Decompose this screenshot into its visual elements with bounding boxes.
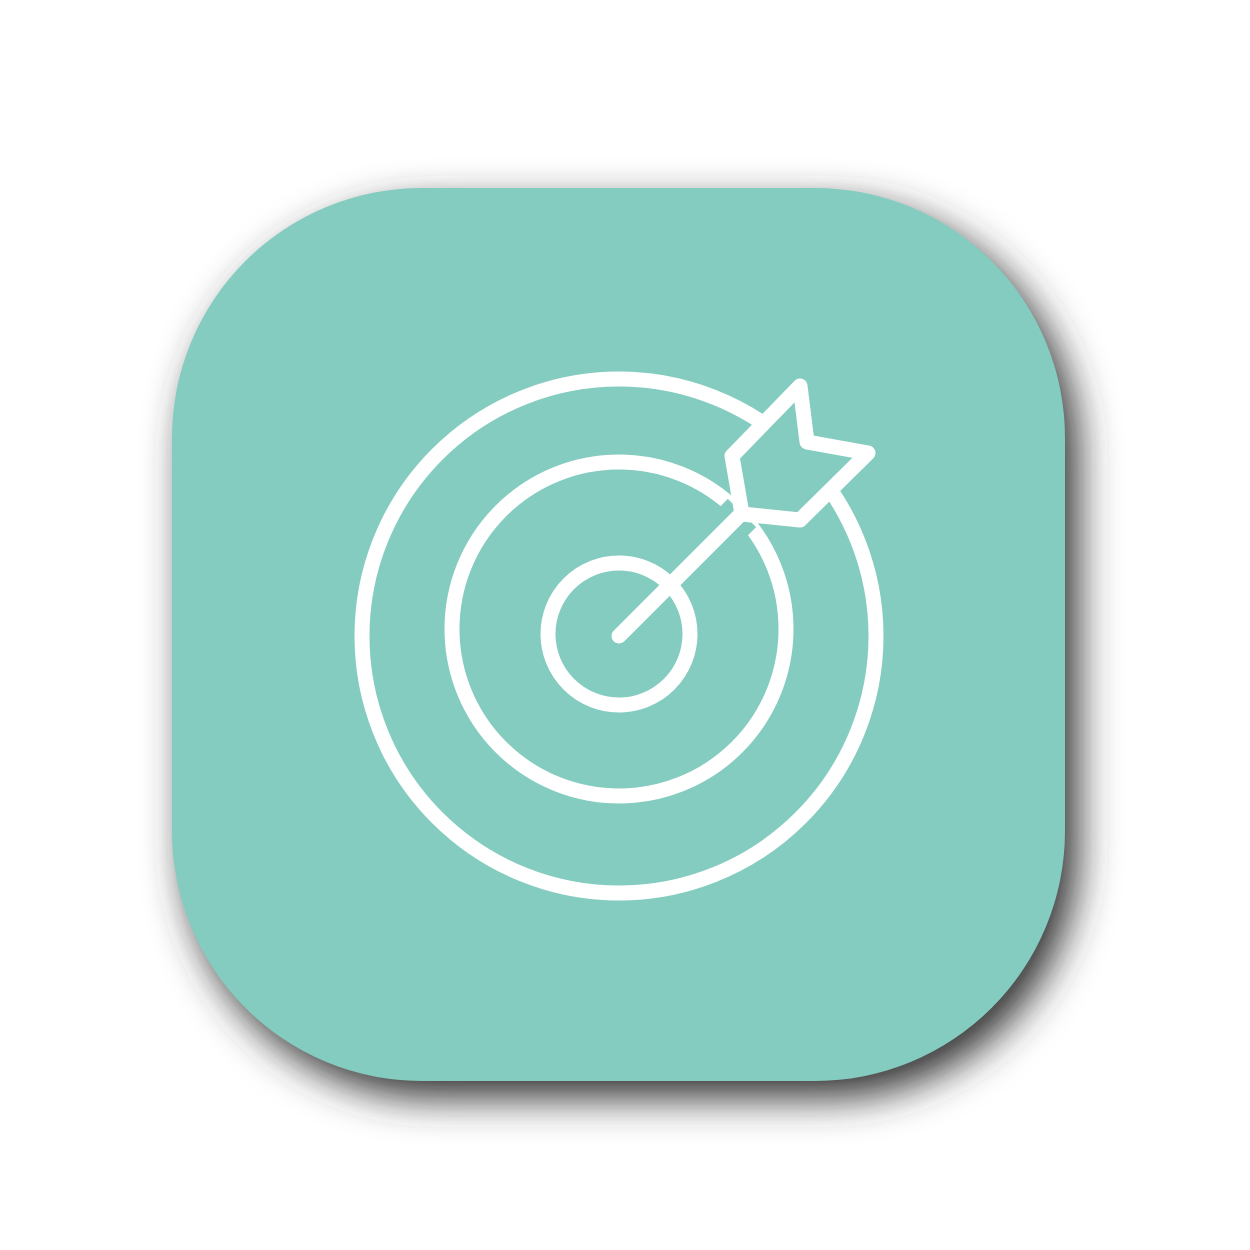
arrow shaft gap (690, 513, 742, 565)
inner ring (548, 563, 690, 705)
arrow shaft (619, 513, 742, 636)
rounded square background (172, 188, 1065, 1081)
shadow (185, 205, 1078, 1098)
outer ring (362, 379, 876, 893)
middle ring (452, 462, 786, 796)
arrow fletching (732, 386, 868, 520)
target rings and arrow (362, 379, 876, 893)
